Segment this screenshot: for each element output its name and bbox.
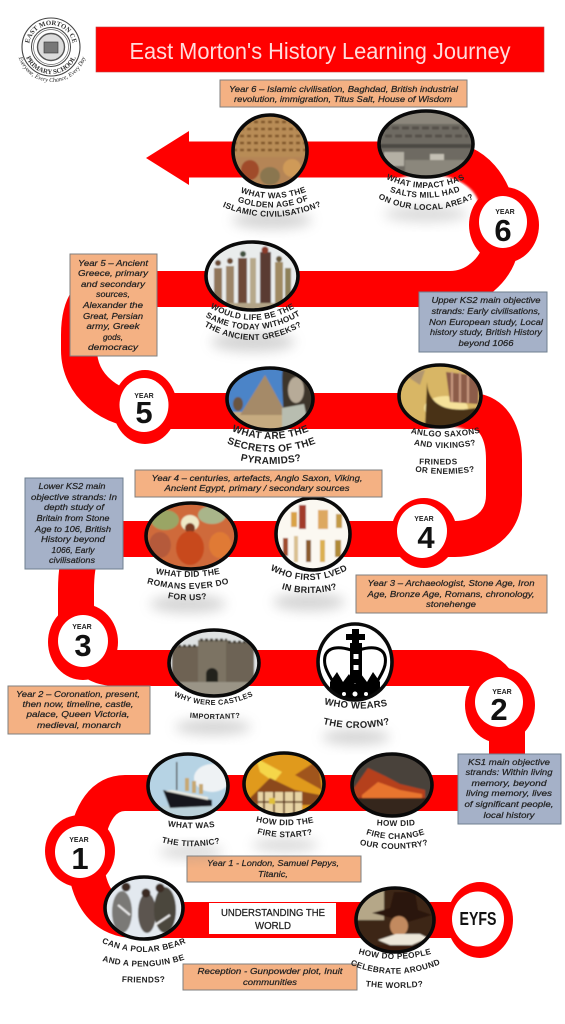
year 6 marker: YEAR bbox=[495, 209, 515, 216]
question: Anglo Saxons and Vikings: FRINEDS bbox=[420, 458, 457, 464]
callout: Year 5 topics: Greece, primary bbox=[78, 268, 149, 278]
photo: first people in Britain bbox=[274, 497, 352, 573]
question: first lived in Britain bbox=[272, 564, 346, 616]
photo: Great Fire house bbox=[242, 751, 326, 817]
winding red road with arrow bbox=[76, 131, 507, 920]
callout: KS1 objectives bbox=[458, 754, 561, 824]
question: Titanic: THE TITANIC? bbox=[162, 836, 219, 846]
question: Anglo Saxons and Vikings: AND VIKINGS? bbox=[414, 440, 475, 448]
question: castles bbox=[174, 691, 252, 740]
callout: Year 4 topics bbox=[135, 470, 382, 497]
callout: Upper KS2 objectives: Upper KS2 main objective bbox=[432, 295, 541, 305]
question: Salts Mill bbox=[379, 174, 472, 226]
question: Salts Mill: ON OUR LOCAL AREA? bbox=[379, 194, 472, 210]
question: pyramids: WHAT ARE THE bbox=[233, 424, 309, 440]
callout: Lower KS2 objectives: Britain from Stone bbox=[36, 513, 110, 523]
year 2 marker: 2 bbox=[490, 692, 508, 727]
year 4 marker: 4 bbox=[417, 520, 435, 555]
year 3 marker: 3 bbox=[74, 628, 92, 663]
year 2 marker: YEAR bbox=[492, 689, 512, 696]
callout: Year 2 topics bbox=[8, 686, 150, 734]
callout: Year 5 topics: Great, Persian bbox=[83, 311, 143, 321]
question: first lived in Britain: IN BRITAIN? bbox=[282, 583, 336, 593]
photo: Islamic golden age bbox=[230, 112, 310, 192]
question: polar bear and penguin: AND A PENGUIN BE bbox=[102, 954, 184, 966]
school logo: PRIMARY SCHOOL bbox=[26, 56, 76, 74]
callout: Upper KS2 objectives: strands: Early civilisations, bbox=[432, 306, 540, 316]
year 5 marker: 5 bbox=[135, 395, 153, 430]
callout: Year 5 topics: sources, bbox=[96, 289, 130, 299]
callout: Upper KS2 objectives: Non European study, Local bbox=[429, 317, 544, 327]
callout: Year 5 topics: and secondary bbox=[81, 279, 146, 289]
photo: Titanic bbox=[146, 753, 230, 820]
callout: Year 2 topics: palace, Queen Victoria, bbox=[25, 709, 129, 719]
callout: Lower KS2 objectives: 1066, Early bbox=[52, 545, 95, 555]
photo: Guy Fawkes bbox=[354, 887, 436, 955]
year 6 marker: 6 bbox=[494, 213, 512, 248]
title banner bbox=[96, 27, 544, 72]
question: Anglo Saxons and Vikings: OR ENEMIES? bbox=[416, 466, 474, 474]
callout: Year 3 topics: Year 3 – Archaeologist, Stone Age, Iron bbox=[368, 578, 535, 588]
question: Salts Mill: SALTS MILL HAD bbox=[390, 186, 460, 198]
callout: KS1 objectives: living memory, lives bbox=[466, 788, 553, 798]
question: Anglo Saxons and Vikings bbox=[410, 428, 480, 474]
year 2 marker bbox=[465, 667, 535, 743]
callout: Year 6 topics: revolution, immigration, Titus Salt, House of Wisdom bbox=[234, 94, 452, 104]
callout: Lower KS2 objectives: History beyond bbox=[41, 534, 105, 544]
question: first lived in Britain: WHO FIRST LVED bbox=[272, 564, 346, 580]
question: how people celebrate: HOW DO PEOPLE bbox=[358, 948, 432, 959]
photo: Viking ship bbox=[397, 363, 484, 429]
question: golden age: WHAT WAS THE bbox=[242, 186, 306, 198]
question: polar bear and penguin: CAN A POLAR BEAR bbox=[102, 938, 186, 952]
photo: Romans bbox=[144, 501, 238, 571]
callout: KS1 objectives: strands: Within living bbox=[466, 767, 553, 777]
year 5 marker bbox=[113, 370, 177, 444]
title banner: East Morton's History Learning Journey bbox=[130, 38, 511, 64]
callout: Upper KS2 objectives: beyond 1066 bbox=[458, 338, 514, 348]
question: how the fire changed the country bbox=[360, 820, 427, 849]
callout: Year 2 topics: then now, timeline, castle, bbox=[22, 699, 134, 709]
callout: Year 5 topics bbox=[70, 254, 157, 356]
callout: Year 4 topics: Year 4 – centuries, artefacts, Anglo Saxon, Viking, bbox=[152, 473, 362, 483]
year 3 marker bbox=[48, 604, 118, 680]
callout: Year 2 topics: Year 2 – Coronation, present, bbox=[16, 689, 140, 699]
EYFS marker bbox=[447, 882, 513, 958]
callout: Year 4 topics: Ancient Egypt, primary / secondary sources bbox=[163, 483, 350, 493]
callout: KS1 objectives: of significant people, bbox=[464, 799, 554, 809]
question: polar bear and penguin: FRIENDS? bbox=[122, 976, 164, 982]
question: how the fire started: FIRE START? bbox=[258, 828, 312, 838]
question: Anglo Saxons and Vikings: ANLGO SAXONS bbox=[410, 428, 480, 437]
question: Salts Mill: WHAT IMPACT HAS bbox=[387, 174, 464, 188]
question: ancient Greeks: THE ANCIENT GREEKS? bbox=[206, 321, 300, 340]
callout: Year 5 topics: army, Greek bbox=[86, 321, 140, 331]
question: crown: THE CROWN? bbox=[324, 718, 388, 728]
callout: Lower KS2 objectives: objective strands: In bbox=[31, 492, 117, 502]
photo: pyramids bbox=[225, 366, 315, 432]
photo: ancient Greeks bbox=[204, 240, 300, 312]
year 6 marker bbox=[469, 187, 539, 263]
photo: Inuit family bbox=[103, 875, 185, 941]
callout: Reception topics bbox=[183, 964, 357, 990]
label: understanding the world bbox=[209, 903, 336, 934]
question: Romans bbox=[147, 568, 228, 618]
photo: burning city bbox=[350, 752, 434, 818]
label: understanding the world: WORLD bbox=[255, 921, 291, 932]
callout: Year 5 topics: gods, bbox=[103, 332, 123, 342]
year 5 marker: YEAR bbox=[134, 393, 154, 400]
question: pyramids: SECRETS OF THE bbox=[228, 437, 316, 452]
year 4 marker bbox=[391, 498, 457, 568]
question: Romans: ROMANS EVER DO bbox=[147, 578, 228, 589]
school logo: Everyone, Every Chance, Every Day bbox=[18, 56, 86, 83]
year 1 marker: YEAR bbox=[69, 837, 89, 844]
callout: Year 1 topics bbox=[187, 856, 361, 882]
callout: KS1 objectives: local history bbox=[484, 810, 535, 820]
question: golden age: ISLAMIC CIVILISATION? bbox=[223, 202, 320, 217]
callout: Lower KS2 objectives: Lower KS2 main bbox=[38, 481, 106, 491]
EYFS marker: EYFS bbox=[460, 909, 496, 929]
photo: castle bbox=[167, 628, 261, 698]
callout: Year 3 topics: Age, Bronze Age, Romans, chronology, bbox=[366, 589, 534, 599]
question: ancient Greeks: SAME TODAY WITHOUT bbox=[206, 310, 299, 330]
icon: crown bbox=[318, 624, 392, 703]
question: castles: WHY WERE CASTLES bbox=[174, 691, 252, 705]
question: how the fire started: HOW DID THE bbox=[256, 816, 314, 826]
question: Romans: FOR US? bbox=[168, 592, 206, 600]
callout: Year 5 topics: Alexander the bbox=[82, 300, 143, 310]
question: how the fire started bbox=[253, 816, 317, 856]
question: polar bear and penguin bbox=[102, 938, 186, 982]
callout: KS1 objectives: KS1 main objective bbox=[468, 757, 550, 767]
callout: KS1 objectives: memory, beyond bbox=[472, 778, 547, 788]
year 4 marker: YEAR bbox=[414, 516, 434, 523]
year 1 marker bbox=[45, 815, 115, 887]
question: castles: IMPORTANT? bbox=[190, 712, 240, 719]
question: how the fire changed the country: OUR COUNTRY? bbox=[360, 840, 427, 849]
school logo bbox=[18, 18, 86, 83]
question: how people celebrate: CELEBRATE AROUND bbox=[351, 960, 440, 974]
label: understanding the world: UNDERSTANDING THE bbox=[221, 908, 325, 919]
callout: Year 3 topics bbox=[356, 575, 547, 613]
callout: Year 1 topics: Titanic, bbox=[258, 869, 288, 879]
question: how the fire changed the country: FIRE CHANGE bbox=[366, 828, 424, 839]
callout: Lower KS2 objectives: Age to 106, British bbox=[34, 524, 111, 534]
callout: Upper KS2 objectives bbox=[419, 292, 547, 352]
question: Titanic bbox=[160, 820, 222, 863]
year 1 marker: 1 bbox=[71, 841, 89, 876]
callout: Reception topics: Reception - Gunpowder plot, Inuit bbox=[198, 966, 343, 976]
callout: Reception topics: communities bbox=[243, 977, 298, 987]
question: how people celebrate bbox=[351, 948, 440, 988]
school logo: EAST MORTON CE bbox=[24, 20, 77, 44]
year 3 marker: YEAR bbox=[72, 624, 92, 631]
question: pyramids: PYRAMIDS? bbox=[240, 454, 300, 464]
callout: Year 5 topics: Year 5 – Ancient bbox=[78, 258, 149, 268]
question: crown bbox=[322, 698, 390, 750]
question: how people celebrate: THE WORLD? bbox=[365, 979, 424, 990]
callout: Year 5 topics: democracy bbox=[88, 342, 139, 352]
callout: Year 3 topics: stonehenge bbox=[426, 599, 476, 609]
callout: Year 2 topics: medieval, monarch bbox=[37, 720, 121, 730]
question: ancient Greeks bbox=[206, 302, 300, 357]
callout: Lower KS2 objectives: civilisations bbox=[49, 555, 96, 565]
callout: Lower KS2 objectives: depth study of bbox=[44, 502, 106, 512]
question: how the fire changed the country: HOW DID bbox=[377, 820, 414, 826]
callout: Year 6 topics: Year 6 – Islamic civilisation, Baghdad, British industrial bbox=[229, 84, 459, 94]
question: golden age: GOLDEN AGE OF bbox=[238, 195, 308, 208]
callout: Year 1 topics: Year 1 - London, Samuel Pepys, bbox=[207, 858, 339, 868]
question: Romans: WHAT DID THE bbox=[156, 568, 220, 577]
callout: Year 6 topics bbox=[220, 80, 467, 107]
callout: Upper KS2 objectives: history study, British History bbox=[430, 327, 543, 337]
question: crown: WHO WEARS bbox=[325, 698, 387, 709]
question: Titanic: WHAT WAS bbox=[168, 820, 214, 828]
question: golden age bbox=[223, 186, 320, 234]
question: pyramids bbox=[228, 424, 316, 464]
question: ancient Greeks: WOULD LIFE BE THE bbox=[211, 302, 294, 320]
callout: Lower KS2 objectives bbox=[25, 478, 123, 569]
photo: Salts Mill bbox=[378, 110, 478, 180]
